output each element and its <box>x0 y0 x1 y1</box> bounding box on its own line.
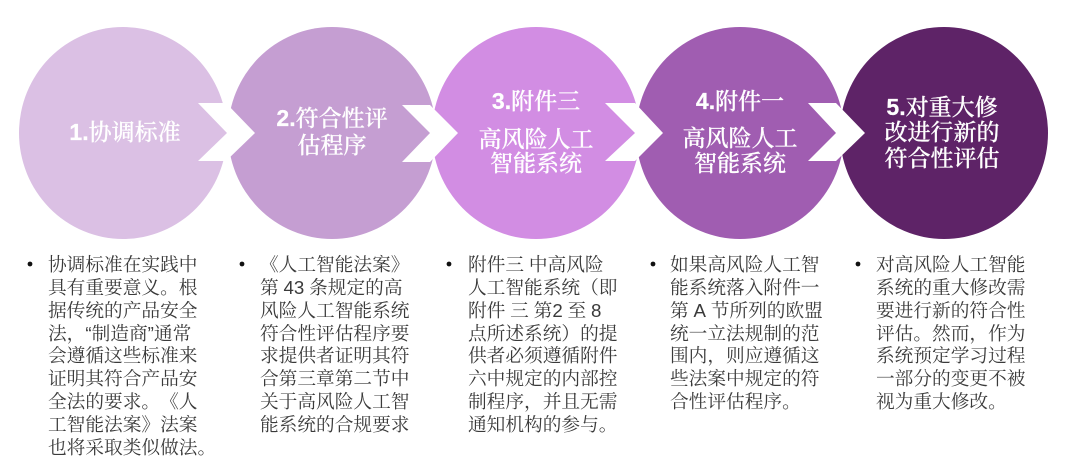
text block 1: 工智能法案》法案 <box>48 410 198 437</box>
text block 4 <box>651 250 823 414</box>
arrow 3 to 4 <box>605 103 663 161</box>
text block 1: 全法的要求。《人 <box>48 387 198 414</box>
heading 3: 3.附件三 <box>492 83 580 116</box>
text block 3: 供者必须遵循附件 <box>468 341 618 368</box>
heading 5: 符合性评估 <box>884 140 1000 173</box>
heading 3: 智能系统 <box>490 145 583 178</box>
text block 4: 能系统落入附件一 <box>670 273 820 300</box>
arrow 1 to 2 <box>198 103 255 161</box>
text block 4: 围内，则应遵循这 <box>670 341 820 368</box>
heading 2: 估程序 <box>298 127 366 160</box>
step 4 circle <box>636 27 844 239</box>
heading 2: 2.符合性评 <box>276 100 388 133</box>
text block 5: 一部分的变更不被 <box>876 364 1026 391</box>
heading 5: 改进行新的 <box>884 114 1000 147</box>
text block 5 <box>856 250 1026 414</box>
text block 1: 会遵循这些标准来 <box>48 341 198 368</box>
text block 2: 合第三章第二节中 <box>260 364 410 391</box>
text block 4: 些法案中规定的符 <box>670 364 820 391</box>
text block 3: 附件 三 第2 至 8 <box>468 296 601 323</box>
heading 4: 4.附件一 <box>696 83 784 116</box>
text block 1: 据传统的产品安全 <box>48 296 198 323</box>
text block 2: 第 43 条规定的高 <box>260 273 403 300</box>
arrow 2 to 3 <box>402 105 458 162</box>
text block 5: 系统预定学习过程 <box>876 341 1026 368</box>
text block 5: 对高风险人工智能 <box>876 250 1026 277</box>
heading 3 <box>478 83 594 178</box>
text block 2: 能系统的合规要求 <box>260 410 410 437</box>
heading 2 <box>276 100 388 160</box>
text block 3: 附件三 中高风险 <box>468 250 604 277</box>
text block 1: 法，“制造商”通常 <box>48 319 191 346</box>
text block 2: 求提供者证明其符 <box>260 341 410 368</box>
text block 5: 要进行新的符合性 <box>876 296 1026 323</box>
heading 4 <box>682 83 798 178</box>
step 1 circle <box>19 27 227 239</box>
text block 1: 也将采取类似做法。 <box>48 433 216 460</box>
step 3 circle <box>432 27 640 239</box>
step 2 circle <box>228 27 436 239</box>
text block 4: 第 A 节所列的欧盟 <box>670 296 823 323</box>
text block 3: 六中规定的内部控 <box>468 364 618 391</box>
arrow 4 to 5 <box>808 103 865 161</box>
heading 3: 高风险人工 <box>478 121 594 154</box>
text block 3: 点所述系统）的提 <box>468 319 618 346</box>
text block 1: 证明其符合产品安 <box>48 364 198 391</box>
text block 5: 视为重大修改。 <box>876 387 1007 414</box>
text block 3: 通知机构的参与。 <box>468 410 618 437</box>
text block 5: 评估。然而，作为 <box>876 319 1026 346</box>
text block 2: 关于高风险人工智 <box>260 387 410 414</box>
text block 2: 符合性评估程序要 <box>260 319 410 346</box>
text block 3: 人工智能系统（即 <box>468 273 618 300</box>
text block 1: 具有重要意义。根 <box>48 273 198 300</box>
text block 3 <box>447 250 618 437</box>
text block 2: 《人工智能法案》 <box>260 250 410 277</box>
step 5 circle <box>840 27 1048 239</box>
heading 5 <box>884 89 1000 173</box>
text block 4: 统一立法规制的范 <box>670 319 820 346</box>
text block 1: 协调标准在实践中 <box>48 250 198 277</box>
text block 3: 制程序，并且无需 <box>468 387 618 414</box>
text block 1 <box>28 250 216 460</box>
heading 1: 1.协调标准 <box>69 114 181 147</box>
text block 5: 系统的重大修改需 <box>876 273 1026 300</box>
heading 4: 智能系统 <box>694 145 787 178</box>
text block 4: 如果高风险人工智 <box>670 250 820 277</box>
text block 2: 风险人工智能系统 <box>260 296 410 323</box>
text block 4: 合性评估程序。 <box>670 387 801 414</box>
heading 4: 高风险人工 <box>682 120 798 153</box>
heading 5: 5.对重大修 <box>886 89 998 122</box>
text block 2 <box>240 250 410 437</box>
